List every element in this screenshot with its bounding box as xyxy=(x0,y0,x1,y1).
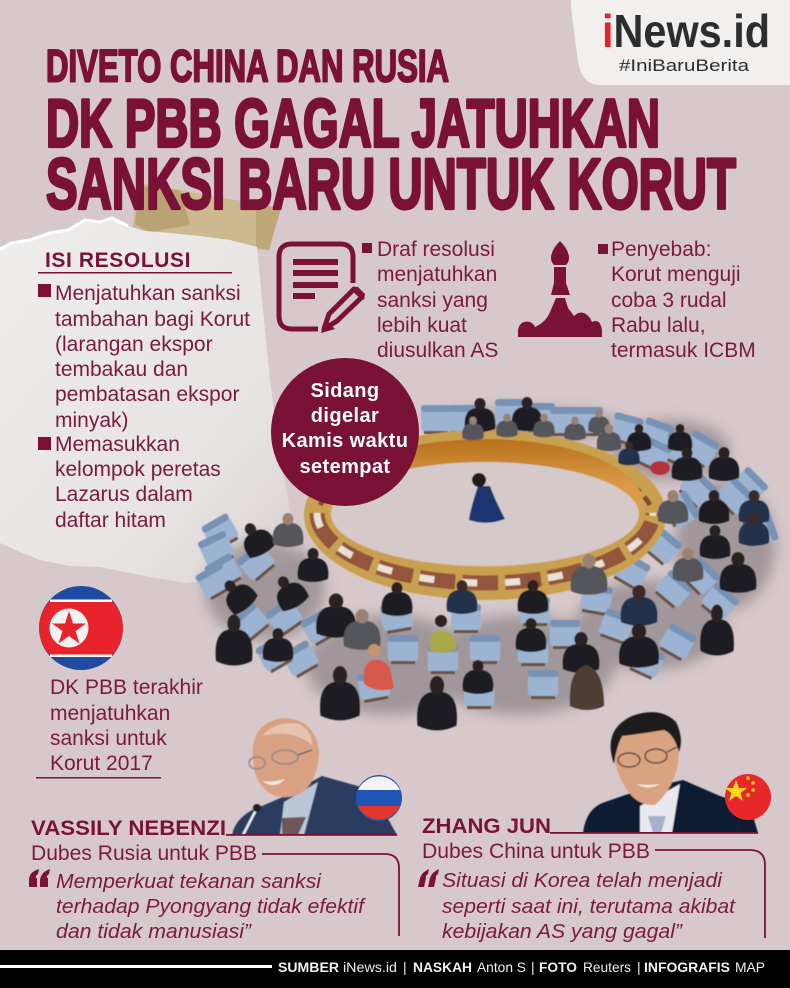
photo: security council chamber xyxy=(195,397,779,730)
bullet list: minyak) xyxy=(55,409,129,432)
text: penyebab: Penyebab: xyxy=(611,238,711,261)
bullet list: tambahan bagi Korut xyxy=(55,308,250,331)
text: penyebab: termasuk ICBM xyxy=(611,339,756,362)
delegates xyxy=(215,397,769,730)
footer credits bar: | xyxy=(637,959,641,975)
photo: zhang jun xyxy=(583,712,758,833)
heading: isi resolusi: ISI RESOLUSI xyxy=(45,249,191,272)
panel: vassily nebenzia quote: dan tidak manusiasi” xyxy=(56,920,252,943)
panel: zhang jun quote xyxy=(418,815,765,943)
logo: iNews.id: iNews.id xyxy=(602,5,770,57)
conference table xyxy=(304,430,666,600)
text: draf resolusi: Draf resolusi xyxy=(377,238,495,261)
bullet list: (larangan ekspor xyxy=(55,333,213,356)
logo: iNews.id: #IniBaruBerita xyxy=(619,57,750,75)
footer credits bar: FOTO xyxy=(539,959,577,975)
footer credits bar: Anton S xyxy=(477,959,526,975)
panel: zhang jun quote: seperti saat ini, terutama akibat xyxy=(442,895,736,918)
text: draf resolusi: menjatuhkan xyxy=(377,263,497,286)
footer credits bar: | xyxy=(403,959,407,975)
bullet list: kelompok peretas xyxy=(55,458,221,481)
text: draf resolusi: sanksi yang xyxy=(377,289,488,312)
icon: quote mark xyxy=(418,869,439,887)
text: sanksi terakhir: menjatuhkan xyxy=(50,702,170,725)
footer credits bar: | xyxy=(531,959,535,975)
panel: vassily nebenzia quote: VASSILY NEBENZI xyxy=(31,817,226,840)
callout: sidang digelar: setempat xyxy=(299,456,391,478)
text: penyebab: Korut menguji xyxy=(611,263,741,286)
footer credits bar: INFOGRAFIS xyxy=(644,959,730,975)
bullet list: tembakau dan xyxy=(55,358,188,381)
panel: zhang jun quote: ZHANG JUN xyxy=(422,815,551,838)
title xyxy=(46,40,736,224)
panel: zhang jun quote: Situasi di Korea telah menjadi xyxy=(442,869,723,892)
callout: sidang digelar: Sidang xyxy=(310,380,380,402)
text: penyebab: Rabu lalu, xyxy=(611,314,706,337)
footer credits bar: MAP xyxy=(735,959,765,975)
photo: vassily nebenzia xyxy=(232,718,397,835)
text: draf resolusi: lebih kuat xyxy=(377,314,467,337)
icon: north korea flag xyxy=(39,586,123,670)
icon: quote mark xyxy=(29,869,50,887)
icon: russia flag xyxy=(356,775,402,821)
logo: iNews.id xyxy=(571,0,790,85)
panel: vassily nebenzia quote: Memperkuat tekanan sanksi xyxy=(56,870,322,893)
panel: zhang jun quote: Dubes China untuk PBB xyxy=(422,840,650,863)
icon: china flag xyxy=(725,774,771,820)
bullet list: pembatasan ekspor xyxy=(55,383,239,406)
title: DIVETO CHINA DAN RUSIA xyxy=(46,40,449,92)
text: penyebab xyxy=(598,238,756,362)
icon: document and pencil xyxy=(279,244,365,333)
bullet list: daftar hitam xyxy=(55,509,166,532)
text: sanksi terakhir: Korut 2017 xyxy=(50,752,153,775)
tape behind paper xyxy=(130,183,281,250)
text: sanksi terakhir: sanksi untuk xyxy=(50,727,167,750)
text: draf resolusi: diusulkan AS xyxy=(377,339,498,362)
panel: zhang jun quote: kebijakan AS yang gagal” xyxy=(442,920,683,943)
footer credits bar xyxy=(0,950,790,988)
panel: vassily nebenzia quote xyxy=(29,817,399,943)
panel: isi resolusi torn paper xyxy=(0,218,300,583)
panel: vassily nebenzia quote: Dubes Rusia untuk PBB xyxy=(31,842,257,865)
callout: sidang digelar: digelar xyxy=(311,405,379,427)
callout: sidang digelar xyxy=(271,358,419,506)
bullet list: Menjatuhkan sanksi xyxy=(55,282,241,305)
icon: rocket launch xyxy=(518,241,602,337)
bullet list: Memasukkan xyxy=(55,433,180,456)
footer credits bar: SUMBER xyxy=(278,959,339,975)
footer credits bar: iNews.id xyxy=(343,959,397,975)
chairs xyxy=(195,399,779,709)
text: draf resolusi xyxy=(362,238,498,362)
speaker figure in blue dress xyxy=(469,473,505,523)
panel: vassily nebenzia quote: terhadap Pyongyang tidak efektif xyxy=(56,895,366,918)
footer credits bar: Reuters xyxy=(583,959,631,975)
text: sanksi terakhir: DK PBB terakhir xyxy=(50,676,203,699)
bullet list xyxy=(38,282,250,532)
footer credits bar: NASKAH xyxy=(413,959,472,975)
callout: sidang digelar: Kamis waktu xyxy=(282,430,408,452)
bullet list: Lazarus dalam xyxy=(55,483,193,506)
text: sanksi terakhir xyxy=(36,676,203,778)
text: penyebab: coba 3 rudal xyxy=(611,289,727,312)
